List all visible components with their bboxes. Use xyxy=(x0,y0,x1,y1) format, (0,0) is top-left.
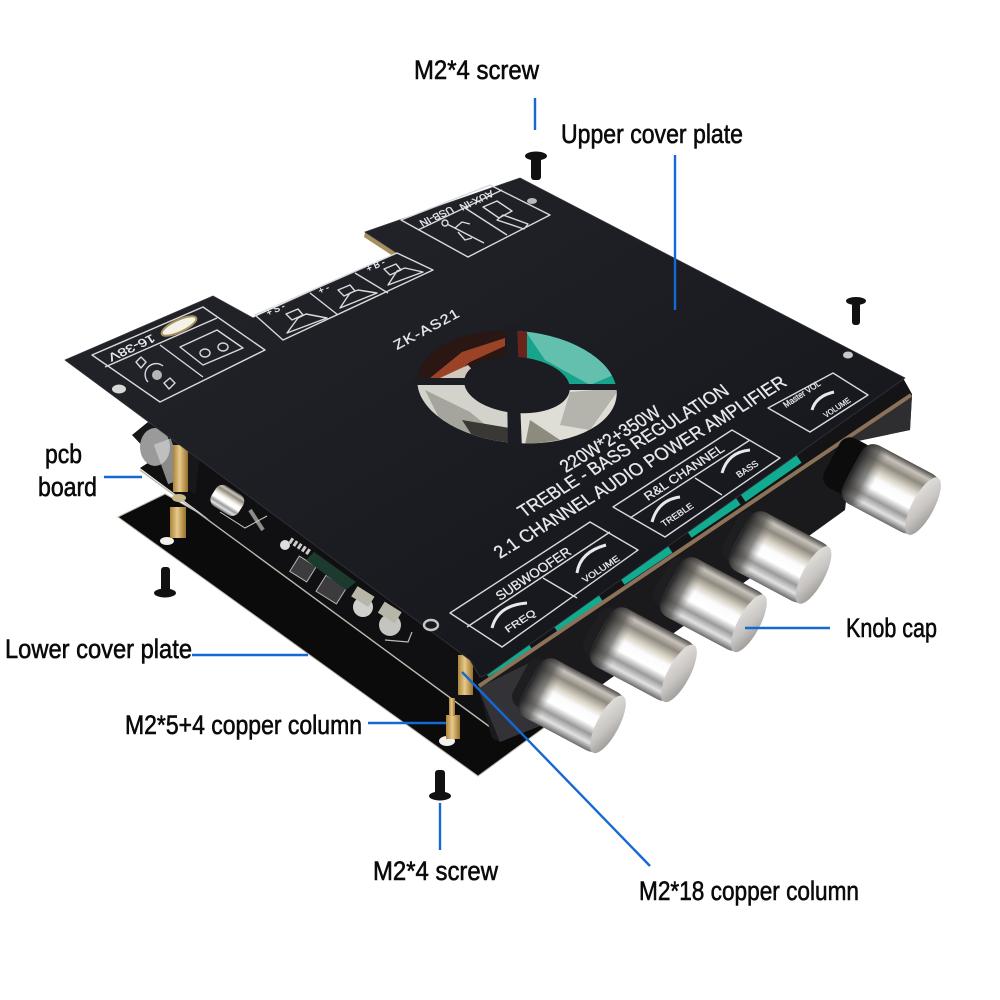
silkscreen box: inputs: USB-IN xyxy=(417,204,455,227)
silkscreen box: master volume xyxy=(768,373,868,432)
component: smd parts xyxy=(280,540,412,642)
leader line: pcb board xyxy=(104,476,142,478)
silkscreen box: subwoofer: FREQ xyxy=(503,608,538,635)
front panel xyxy=(478,394,912,742)
teal edge band xyxy=(479,378,912,686)
silkscreen box: r&l channel: TREBLE xyxy=(659,501,696,529)
screw: left xyxy=(154,567,176,598)
knob cap 2 xyxy=(576,598,704,708)
silkscreen box: speaker terminals: + S - xyxy=(265,301,286,318)
silkscreen box: speaker terminals: + - xyxy=(317,282,331,296)
label: top screw: M2*4 screw xyxy=(414,55,539,85)
label: board: board xyxy=(38,472,97,502)
lower cover plate xyxy=(118,494,560,776)
model name: ZK-AS21 xyxy=(391,307,462,353)
leader line: top screw xyxy=(534,98,536,130)
upper cover plate xyxy=(65,178,905,677)
silkscreen box: r&l channel: R&L CHANNEL xyxy=(641,442,727,503)
screw: top xyxy=(525,152,547,180)
leader line: lower cover plate xyxy=(192,654,308,656)
component: large capacitor xyxy=(132,422,200,495)
label: m2*18 copper column: M2*18 copper column xyxy=(639,876,859,906)
label: bottom screw: M2*4 screw xyxy=(373,856,498,886)
label: upper cover plate: Upper cover plate xyxy=(561,119,743,149)
m2*5+4 copper column front xyxy=(446,698,460,739)
label: pcb: pcb xyxy=(45,439,82,469)
label: knob cap: Knob cap xyxy=(846,613,937,643)
knob cap 1 xyxy=(505,649,633,759)
knob cap 4 xyxy=(715,502,839,609)
component: diode capacitor xyxy=(207,482,267,530)
label: m2*5+4 copper column: M2*5+4 copper column xyxy=(125,710,362,740)
silkscreen box: subwoofer: VOLUME xyxy=(580,554,622,585)
knob cap 5 xyxy=(817,429,948,540)
pcb board xyxy=(132,422,560,728)
silkscreen box: subwoofer: SUBWOOFER xyxy=(493,545,575,604)
silkscreen box: master volume: VOLUME xyxy=(821,395,853,419)
leader line: m2*18 column xyxy=(462,672,650,866)
silkscreen box: inputs xyxy=(401,185,550,257)
heading: treble bass regulation: TREBLE - BASS REGULATION xyxy=(514,381,733,522)
m2*18 copper column left xyxy=(173,445,188,492)
silkscreen box: power: 16-38V xyxy=(105,332,158,364)
silkscreen box: r&l channel: BASS xyxy=(734,459,761,480)
heading: 220w: 220W*2+350W xyxy=(556,402,666,477)
silkscreen box: speaker terminals: + B - xyxy=(365,257,386,274)
silkscreen box: master volume: Master VOL xyxy=(781,379,823,410)
fan opening xyxy=(418,330,617,444)
silkscreen box: subwoofer xyxy=(450,522,638,647)
silkscreen box: inputs: AUX-IN xyxy=(457,188,495,211)
silkscreen box: r&l channel xyxy=(613,430,780,537)
label: lower cover plate: Lower cover plate xyxy=(5,634,192,664)
leader line: m2*5+4 column xyxy=(368,722,446,724)
m2*18 copper column front xyxy=(458,655,473,695)
fan hub and spokes xyxy=(410,325,625,450)
heading: 2.1 channel: 2.1 CHANNEL AUDIO POWER AMPLIFIER xyxy=(490,372,791,563)
screw: bottom xyxy=(429,770,451,800)
silkscreen box: power xyxy=(92,307,265,402)
silkscreen box: speaker terminals xyxy=(255,253,433,340)
mounting holes xyxy=(112,198,853,630)
knob cap 3 xyxy=(646,548,774,658)
leader line: upper cover plate xyxy=(674,155,676,310)
leader line: bottom screw xyxy=(439,803,441,850)
leader line: knob cap xyxy=(745,627,830,629)
m2*5+4 copper column left xyxy=(170,494,186,538)
screw: right xyxy=(846,297,866,325)
